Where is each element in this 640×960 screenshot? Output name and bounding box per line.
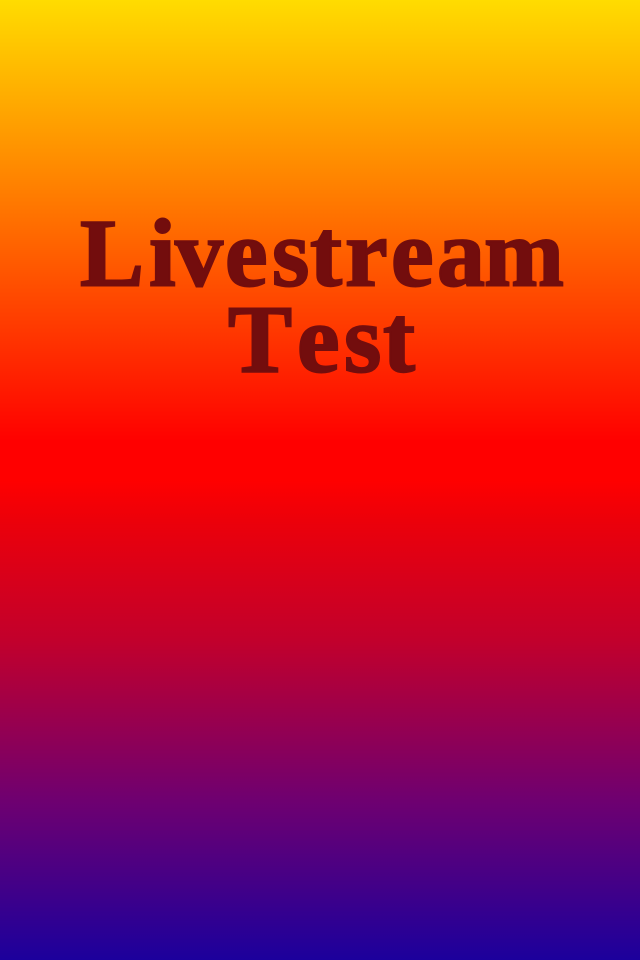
title line 1: Livestream — [80, 200, 564, 306]
title line 2: Test — [228, 286, 415, 392]
